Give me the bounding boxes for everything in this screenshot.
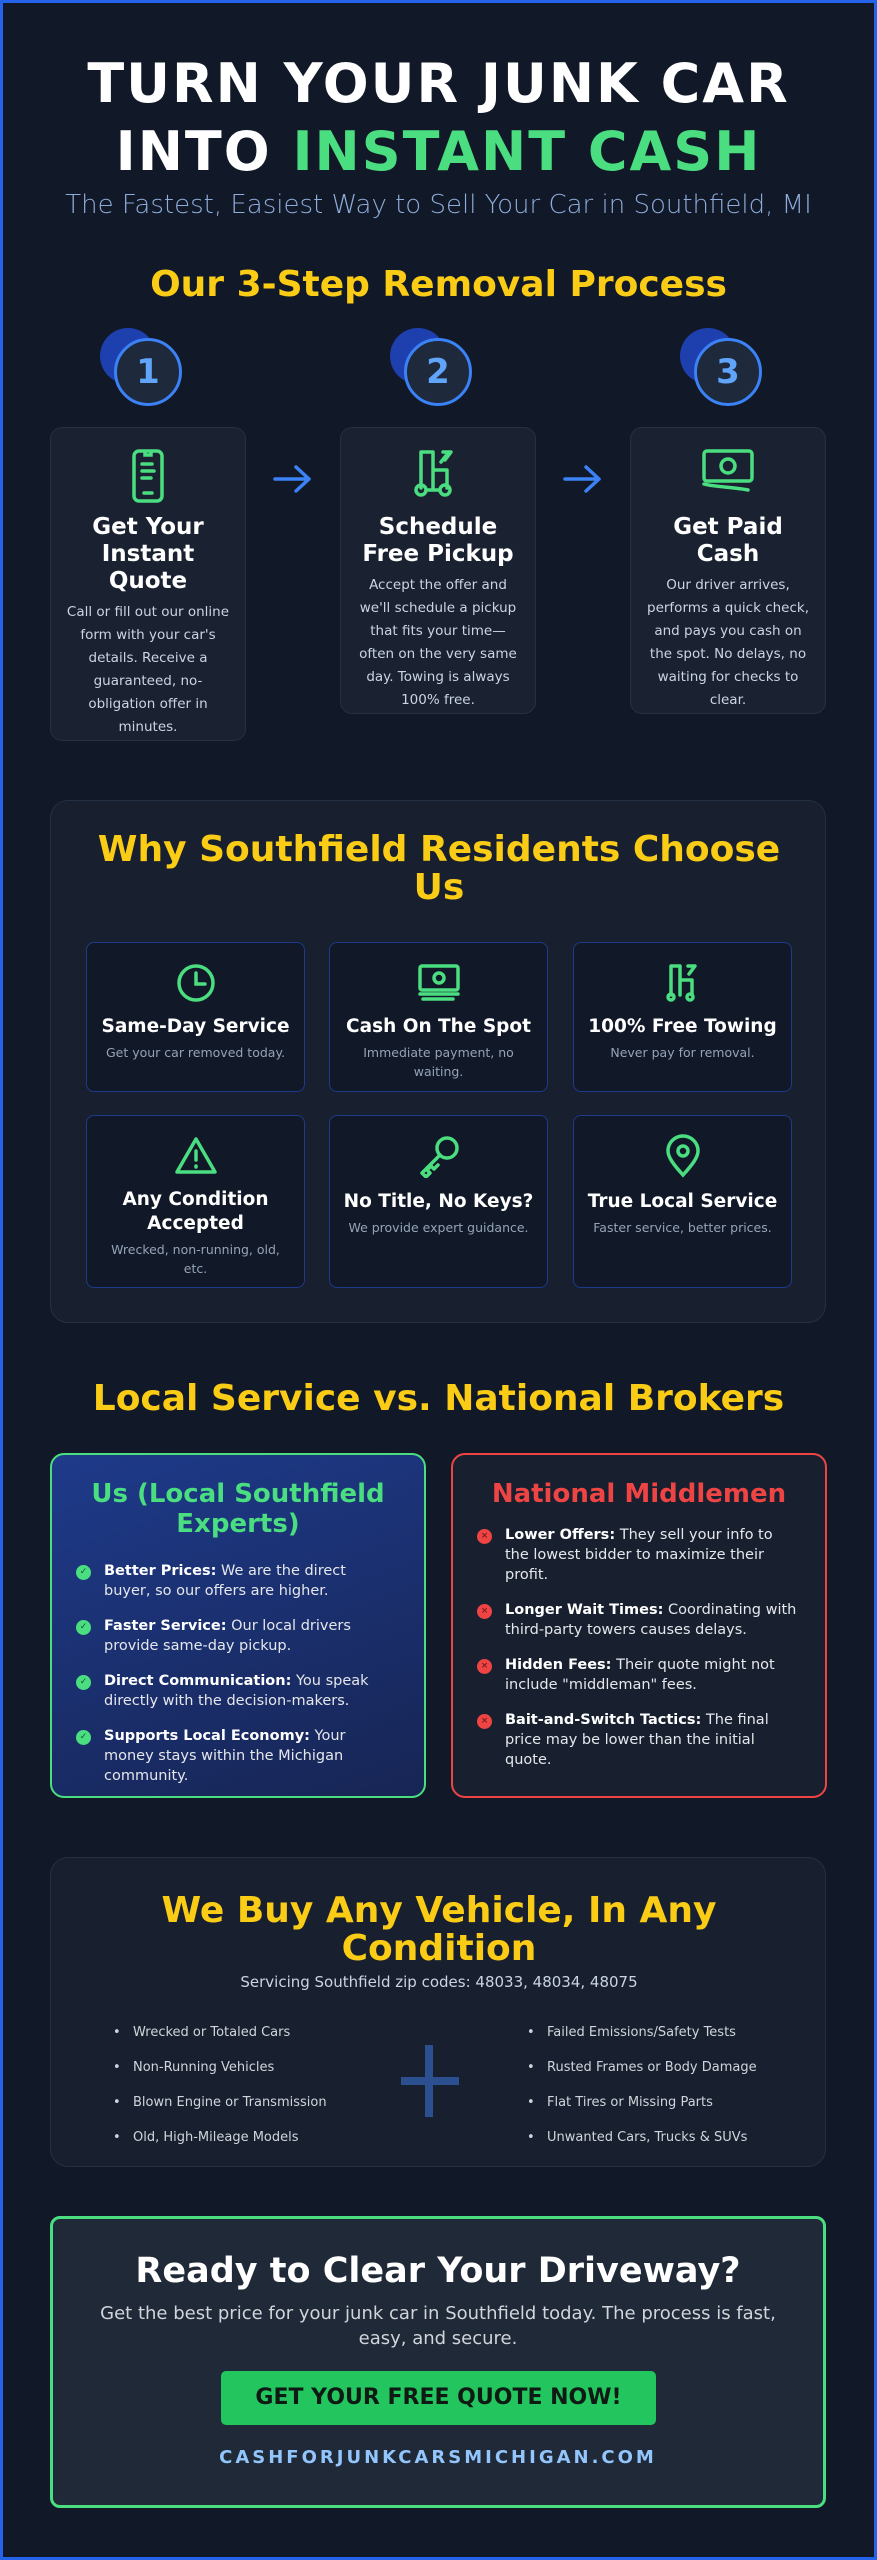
- list: right: •: [527, 2025, 535, 2040]
- feature: any condition: Any Condition: [122, 1189, 269, 1210]
- list: right: Failed Emissions/Safety Tests: [547, 2025, 736, 2040]
- panel: we buy any vehicle: [50, 1857, 826, 2167]
- heading: us: Us (Local Southfield: [91, 1479, 385, 1509]
- feature: cash: Immediate payment, no waiting.: [363, 1045, 514, 1079]
- step card 2: Schedule: [379, 514, 497, 540]
- list: left: [113, 2025, 327, 2145]
- panel: us (local): [50, 1453, 426, 1798]
- button: [221, 2371, 656, 2425]
- list: advantages: Faster Service: Our local drivers provide same-day pickup.: [104, 1618, 351, 1654]
- step card 1: [50, 427, 246, 741]
- step card 1: Call or fill out our online form with your car's details. Receive a guaranteed, no-obligation offer in minutes.: [67, 604, 229, 735]
- button: GET YOUR FREE QUOTE NOW!: [255, 2385, 622, 2410]
- list: left: Non-Running Vehicles: [133, 2060, 274, 2075]
- feature: any condition: [86, 1115, 305, 1288]
- feature: any condition: Wrecked, non-running, old, etc.: [111, 1242, 280, 1276]
- panel: national middlemen: [451, 1453, 827, 1798]
- feature: cash: [329, 942, 548, 1092]
- step number 3: 3: [716, 352, 740, 392]
- heading: local vs national: Local Service vs. National Brokers: [93, 1378, 784, 1419]
- list: left: •: [113, 2060, 121, 2075]
- list: disadvantages: Bait-and-Switch Tactics: The final price may be lower than the initial quote.: [505, 1712, 769, 1768]
- feature: any condition: Accepted: [147, 1213, 244, 1234]
- arrow 1: [273, 465, 311, 493]
- step card 3: Get Paid: [673, 514, 783, 540]
- list: advantages: ✓: [80, 1677, 87, 1687]
- subtitle: The Fastest, Easiest Way to Sell Your Car in Southfield, MI: [65, 190, 812, 220]
- list: left: Blown Engine or Transmission: [133, 2095, 327, 2110]
- arrow 2: [563, 465, 601, 493]
- zip codes: Servicing Southfield zip codes: 48033, 48034, 48075: [240, 1973, 638, 1991]
- heading: why choose: [98, 829, 780, 908]
- icon: tow truck: [414, 450, 453, 497]
- heading: any vehicle: Condition: [342, 1928, 536, 1969]
- list: left: •: [113, 2025, 121, 2040]
- icon: cash: [702, 449, 754, 492]
- list: right: Unwanted Cars, Trucks & SUVs: [547, 2130, 747, 2145]
- list: advantages: ✓: [80, 1622, 87, 1632]
- feature: cash: Cash On The Spot: [346, 1016, 531, 1037]
- list: right: Flat Tires or Missing Parts: [547, 2095, 713, 2110]
- feature: local: True Local Service: [588, 1191, 777, 1212]
- list: disadvantages: Longer Wait Times: Coordinating with third-party towers causes delays.: [505, 1602, 796, 1638]
- feature: towing: 100% Free Towing: [588, 1016, 777, 1037]
- feature: same-day: Get your car removed today.: [106, 1045, 285, 1060]
- list: disadvantages: Hidden Fees: Their quote might not include "middleman" fees.: [505, 1657, 775, 1693]
- list: right: [527, 2025, 757, 2145]
- feature: no title: [329, 1115, 548, 1288]
- step card 1: Instant: [102, 541, 194, 567]
- feature: local: Faster service, better prices.: [593, 1220, 772, 1235]
- list: disadvantages: ×: [481, 1716, 488, 1726]
- heading: 3-step process: Our 3-Step Removal Process: [150, 264, 727, 305]
- list: advantages: Better Prices: We are the direct buyer, so our offers are higher.: [104, 1563, 346, 1599]
- step number 2: 2: [426, 352, 450, 392]
- step card 3: Cash: [697, 541, 759, 567]
- list: advantages: ✓: [80, 1732, 87, 1742]
- step number 1: [100, 328, 182, 406]
- list: left: •: [113, 2130, 121, 2145]
- feature: towing: Never pay for removal.: [610, 1045, 755, 1060]
- step card 3: [630, 427, 826, 714]
- title: TURN YOUR JUNK CAR: [87, 52, 790, 115]
- heading: why choose: Us: [414, 867, 464, 908]
- list: advantages: Direct Communication: You speak directly with the decision-makers.: [104, 1673, 369, 1709]
- step number 2: [390, 328, 472, 406]
- list: advantages: [76, 1563, 369, 1784]
- title: INTO INSTANT CASH: [116, 120, 761, 183]
- step card 2: Accept the offer and we'll schedule a pickup that fits your time—often on the very same day. Towing is always 100% free.: [359, 577, 517, 708]
- list: disadvantages: Lower Offers: They sell your info to the lowest bidder to maximize their profit.: [505, 1527, 773, 1583]
- step number 3: [680, 328, 762, 406]
- list: left: Old, High-Mileage Models: [133, 2130, 299, 2145]
- feature: local: [573, 1115, 792, 1288]
- panel: call to action: [50, 2216, 826, 2508]
- list: right: •: [527, 2060, 535, 2075]
- step card 3: Our driver arrives, performs a quick check, and pays you cash on the spot. No delays, no waiting for checks to clear.: [647, 577, 809, 708]
- heading: cta: Ready to Clear Your Driveway?: [135, 2251, 741, 2291]
- list: advantages: Supports Local Economy: Your money stays within the Michigan community.: [104, 1728, 346, 1784]
- step card 2: [340, 427, 536, 714]
- website url: CASHFORJUNKCARSMICHIGAN.COM: [219, 2447, 657, 2468]
- icon: plus: [401, 2045, 459, 2117]
- heading: national: National Middlemen: [492, 1479, 786, 1509]
- list: disadvantages: ×: [481, 1531, 488, 1541]
- list: disadvantages: [477, 1527, 796, 1768]
- step card 1: Get Your: [92, 514, 204, 540]
- list: disadvantages: ×: [481, 1661, 488, 1671]
- feature: same-day: Same-Day Service: [102, 1016, 290, 1037]
- feature: towing: [573, 942, 792, 1092]
- title: [87, 52, 790, 183]
- step card 2: Free Pickup: [362, 541, 514, 567]
- icon: phone: [132, 449, 164, 503]
- list: right: •: [527, 2095, 535, 2110]
- heading: why choose: Why Southfield Residents Choose: [98, 829, 780, 870]
- list: disadvantages: ×: [481, 1606, 488, 1616]
- feature: no title: We provide expert guidance.: [348, 1220, 529, 1235]
- list: right: Rusted Frames or Body Damage: [547, 2060, 757, 2075]
- feature: no title: No Title, No Keys?: [344, 1191, 533, 1212]
- list: left: •: [113, 2095, 121, 2110]
- feature: same-day: [86, 942, 305, 1092]
- list: left: Wrecked or Totaled Cars: [133, 2025, 290, 2040]
- panel: why choose us: [50, 800, 826, 1323]
- cta text: Get the best price for your junk car in Southfield today. The process is fast, easy, and secure.: [100, 2303, 776, 2349]
- list: advantages: ✓: [80, 1567, 87, 1577]
- heading: any vehicle: We Buy Any Vehicle, In Any: [161, 1890, 717, 1931]
- heading: any vehicle: [161, 1890, 717, 1969]
- step card 1: Quote: [109, 568, 187, 594]
- heading: us: [91, 1479, 385, 1539]
- heading: us: Experts): [176, 1509, 300, 1539]
- list: right: •: [527, 2130, 535, 2145]
- step number 1: 1: [136, 352, 160, 392]
